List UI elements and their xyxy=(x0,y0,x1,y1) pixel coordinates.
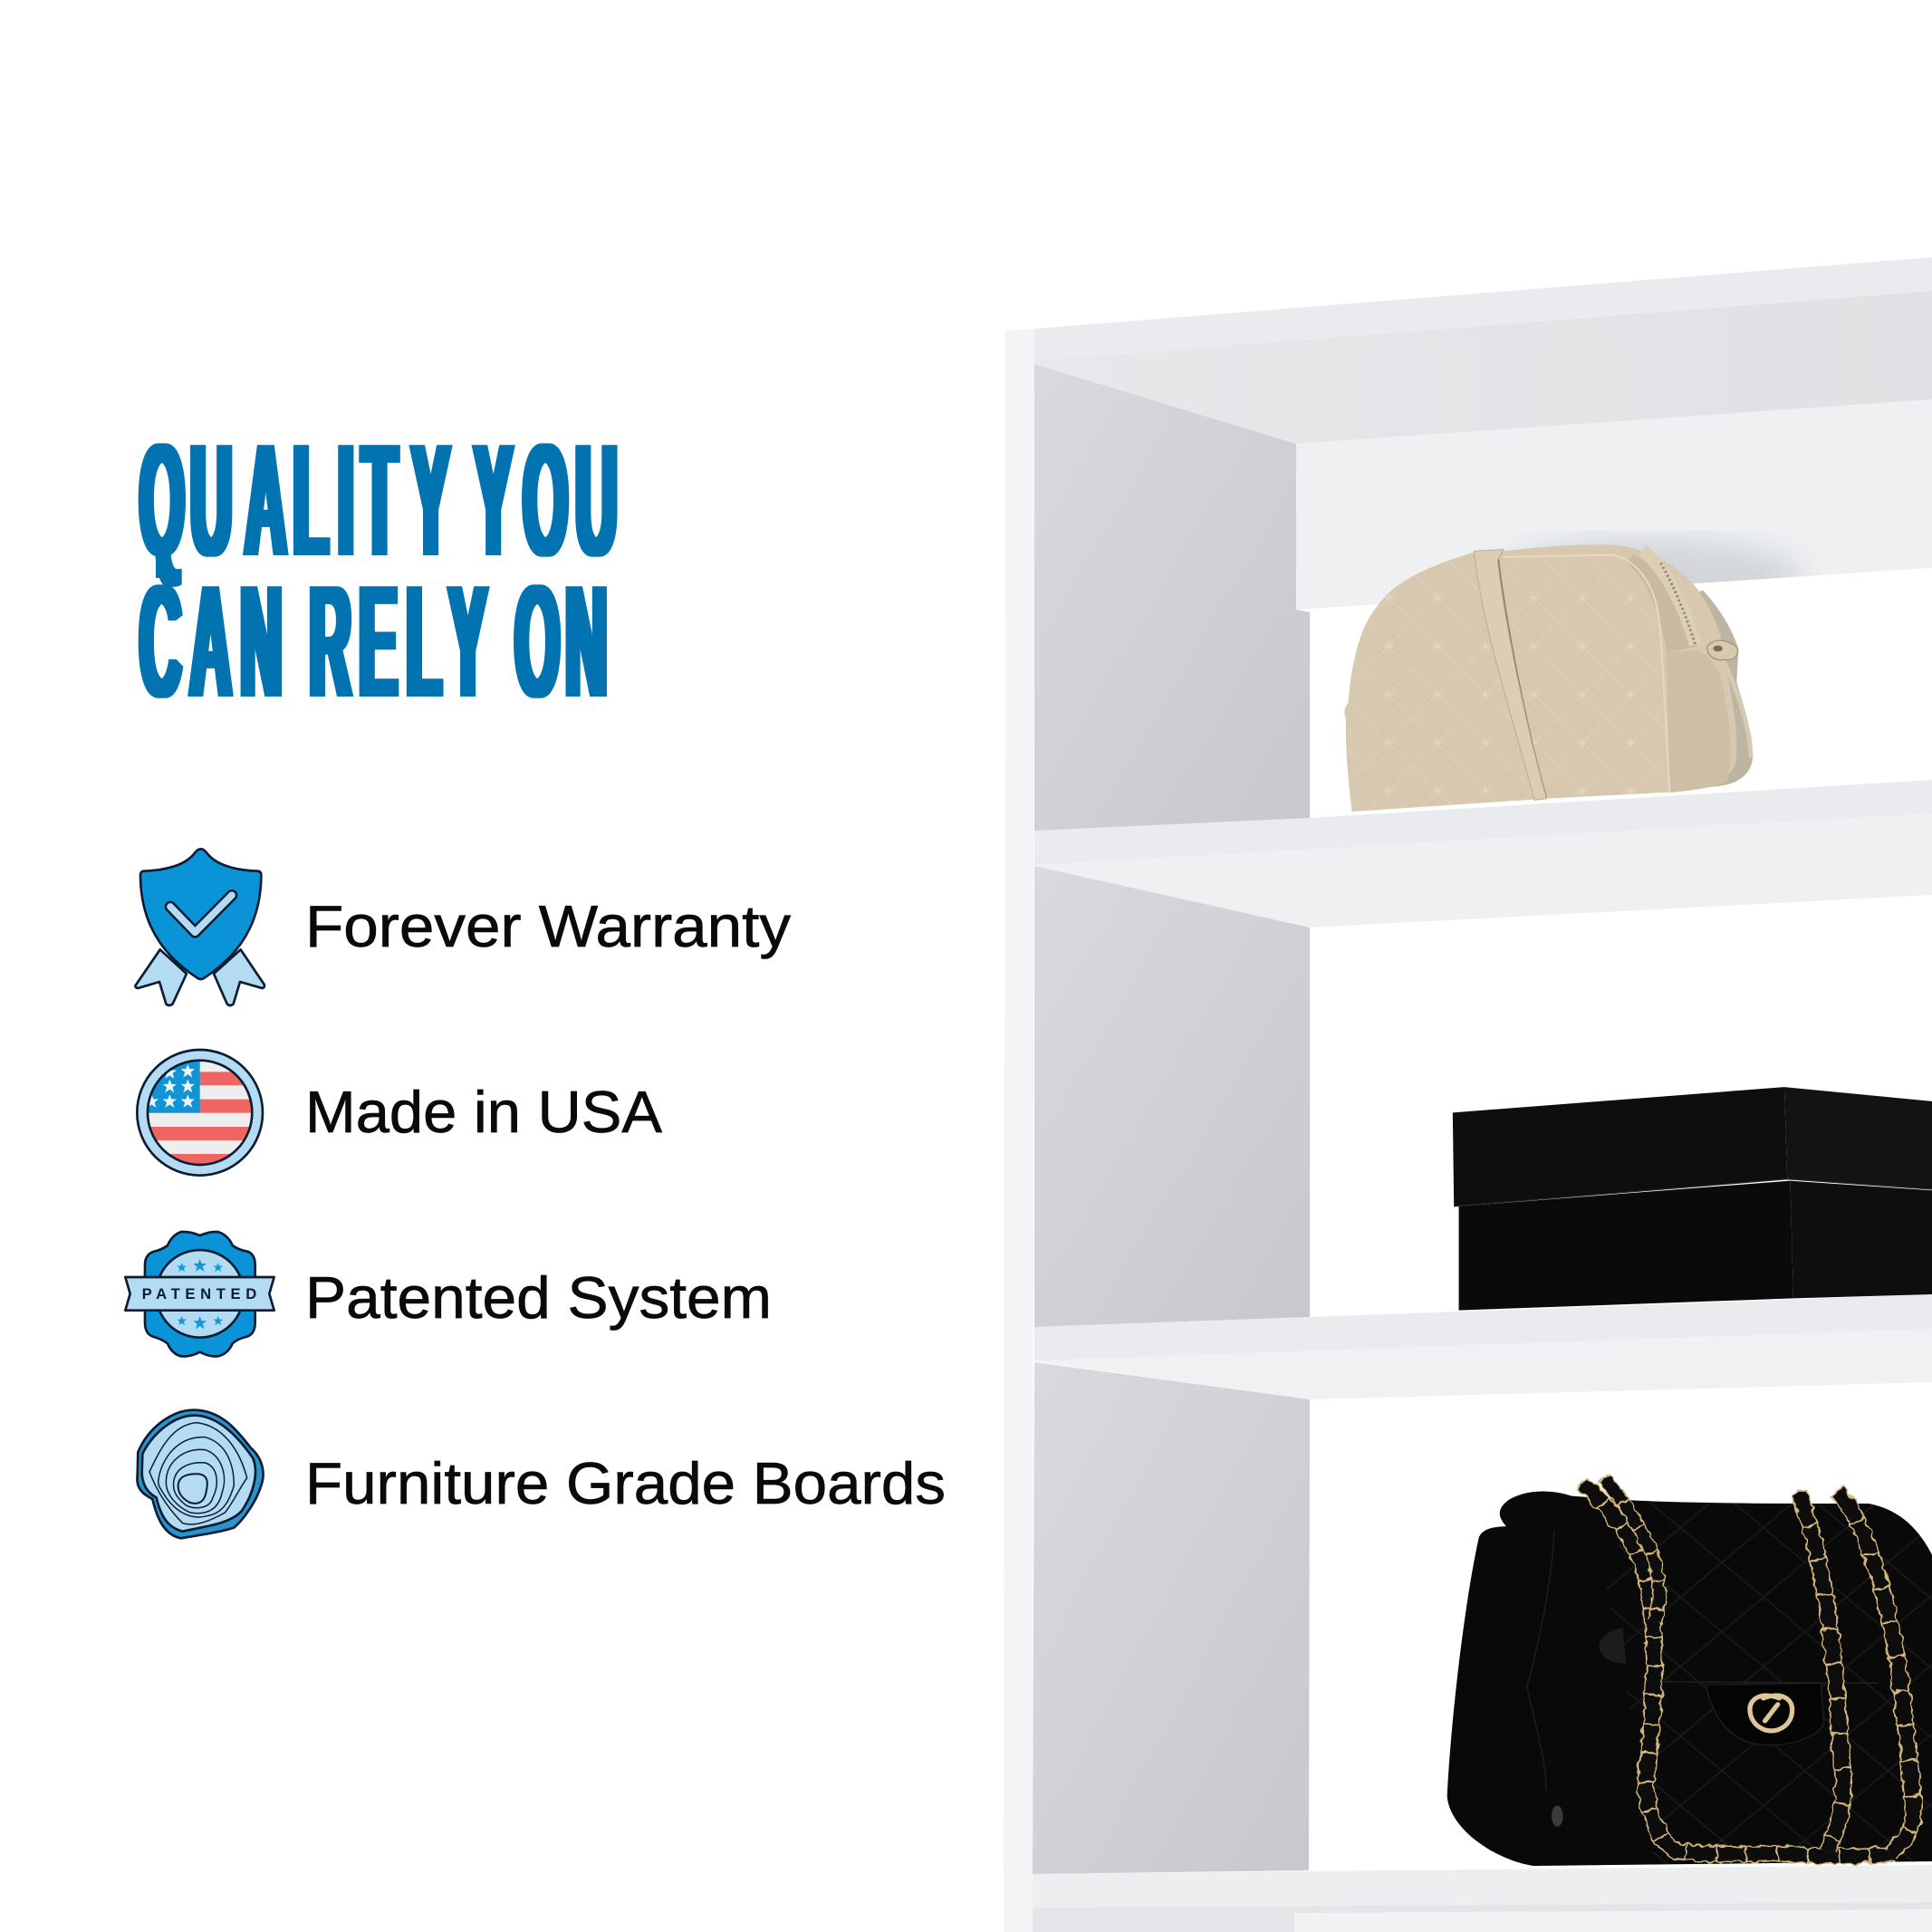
second shelf underside xyxy=(1034,813,1932,928)
feature: forever warranty xyxy=(135,849,792,1005)
third shelf underside xyxy=(1034,1329,1932,1399)
beige handbag xyxy=(1344,544,1753,812)
black quilted handbag with chain xyxy=(1447,1478,1932,1866)
icon: patented badge: PATENTED xyxy=(142,1285,256,1302)
bottom shelf underside xyxy=(1033,1902,1932,1932)
chain straps xyxy=(1581,1478,1914,1856)
feature: patented system xyxy=(125,1232,772,1356)
back panel xyxy=(1296,399,1932,610)
feature list xyxy=(125,849,946,1538)
title xyxy=(139,412,617,732)
label: patented system: Patented System xyxy=(305,1264,772,1331)
third shelf front edge xyxy=(1034,1294,1932,1360)
icon: patented badge xyxy=(125,1232,274,1356)
top shelf front edge xyxy=(1034,257,1932,360)
feature: furniture grade boards xyxy=(137,1410,946,1538)
bottom shelf front edge xyxy=(1033,1865,1932,1908)
label: made in usa: Made in USA xyxy=(305,1079,663,1145)
top shelf underside xyxy=(1034,291,1932,444)
title: QUALITY YOU xyxy=(139,412,617,591)
label: forever warranty: Forever Warranty xyxy=(305,893,792,959)
icon: shield with ribbon and check xyxy=(135,849,264,1005)
second shelf front edge xyxy=(1034,780,1932,865)
bag shadow on back panel xyxy=(1522,531,1804,583)
bottom back panel xyxy=(1294,1909,1932,1932)
icon: american flag circle xyxy=(137,1050,263,1176)
outer side post xyxy=(1004,329,1034,1932)
shelving unit xyxy=(1004,257,1932,1932)
lower left wall xyxy=(1033,1362,1310,1874)
label: furniture grade boards: Furniture Grade Boards xyxy=(305,1450,946,1516)
flap pocket xyxy=(1706,1683,1824,1745)
title: CAN RELY ON xyxy=(139,553,607,732)
black gift box xyxy=(1453,1087,1932,1311)
upper left wall xyxy=(1034,364,1310,831)
logo clasp xyxy=(1750,1696,1793,1731)
icon: wood rings xyxy=(137,1410,264,1538)
middle left wall xyxy=(1034,866,1310,1327)
feature: made in usa xyxy=(137,1050,663,1176)
